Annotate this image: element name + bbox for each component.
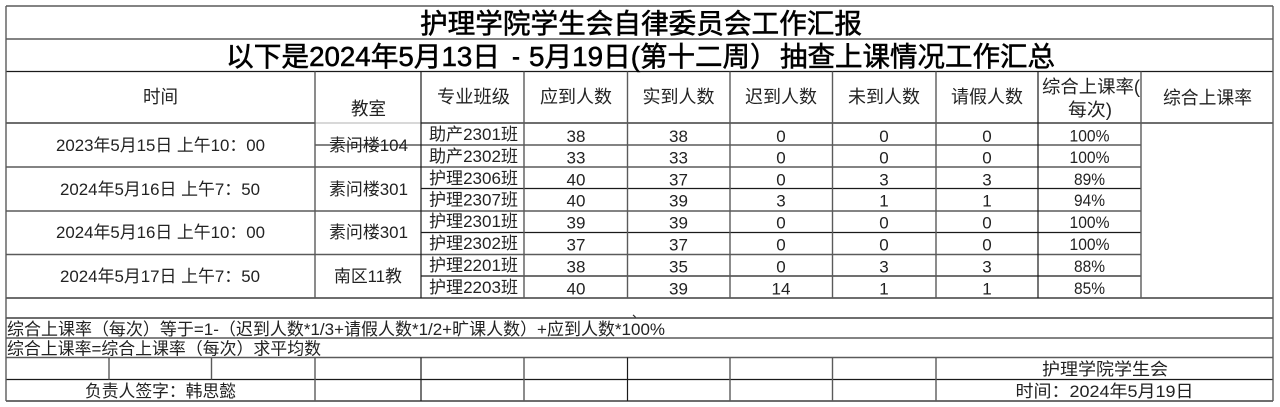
data row: 护理2307班: 40 — [567, 192, 585, 210]
data row: 护理2201班: 35 — [669, 258, 688, 276]
data row: 护理2307班: 3 — [776, 192, 786, 210]
data row: 护理2201班: 38 — [567, 258, 585, 276]
formula note: per-session rate: 综合上课率（每次）等于=1-（迟到人数*1/3+请假人数*1/2+旷课人数）+应到人数*100% — [7, 320, 665, 339]
data row: 护理2201班: 0 — [776, 258, 786, 276]
data row: 护理2302班: 0 — [879, 236, 889, 254]
report date: 时间：2024年5月19日 — [1016, 382, 1194, 401]
data row: 护理2203班 — [429, 278, 1105, 298]
classrooms: 素问楼301 — [329, 180, 408, 199]
session times: 2024年5月16日 上午7：50 — [60, 180, 260, 199]
data row: 护理2302班: 0 — [982, 236, 992, 254]
table header row: 专业班级 — [437, 87, 510, 107]
data row: 护理2203班: 护理2203班 — [429, 278, 518, 297]
table header row: 迟到人数 — [745, 87, 817, 107]
classrooms: 素问楼301 — [329, 223, 408, 242]
table header row: 实到人数 — [642, 87, 714, 107]
data row: 护理2201班: 护理2201班 — [429, 256, 518, 275]
data row: 助产2302班: 100% — [1070, 148, 1110, 167]
data row: 助产2301班: 0 — [879, 127, 889, 146]
data row: 护理2307班: 1 — [879, 192, 889, 210]
classrooms: 南区11教 — [334, 267, 402, 286]
data row: 护理2302班: 37 — [669, 236, 688, 254]
signature: 负责人签字：韩思懿 — [85, 382, 236, 401]
data row: 护理2201班: 3 — [879, 258, 889, 276]
data row: 护理2203班: 85% — [1074, 279, 1105, 298]
data row: 护理2301班: 100% — [1070, 213, 1110, 232]
data row: 护理2203班: 39 — [669, 280, 688, 298]
data row: 护理2302班 — [429, 234, 1110, 254]
data row: 护理2307班: 94% — [1074, 191, 1105, 210]
data row: 助产2301班: 0 — [982, 127, 992, 146]
data row: 助产2302班 — [429, 147, 1110, 168]
data row: 护理2307班: 护理2307班 — [429, 190, 518, 210]
table header row: 未到人数 — [848, 87, 920, 107]
session times: 2023年5月15日 上午10：00 — [56, 136, 265, 155]
subtitle: 抽查上课情况工作汇总 — [780, 41, 1055, 72]
formula note: average rate: 综合上课率=综合上课率（每次）求平均数 — [7, 340, 321, 358]
table header row: 综合上课率( — [1042, 77, 1140, 97]
data row: 护理2301班: 0 — [982, 214, 992, 232]
data row: 护理2301班: 39 — [669, 214, 688, 232]
subtitle: - — [512, 41, 520, 72]
classrooms — [329, 136, 408, 286]
data row: 护理2307班: 1 — [982, 192, 992, 210]
table header row: 教室 — [351, 99, 386, 119]
data row: 护理2302班: 100% — [1070, 235, 1110, 254]
data row: 护理2306班: 3 — [982, 170, 992, 190]
data row: 助产2301班: 助产2301班 — [429, 125, 518, 144]
data row: 护理2301班 — [429, 212, 1110, 232]
data row: 助产2301班: 38 — [567, 127, 585, 146]
data row: 助产2301班: 38 — [669, 127, 688, 146]
data row: 护理2301班: 39 — [567, 214, 585, 232]
data row: 护理2201班: 3 — [982, 258, 992, 276]
data row: 助产2301班 — [429, 125, 1110, 146]
data row: 护理2301班: 护理2301班 — [429, 212, 518, 231]
data row: 助产2302班: 0 — [982, 148, 992, 168]
session times — [56, 136, 265, 286]
data row: 护理2306班: 0 — [776, 170, 786, 190]
table header row: 应到人数 — [540, 87, 612, 107]
table header row: 时间 — [143, 87, 178, 107]
table header row: 综合上课率 — [1163, 88, 1252, 108]
data row: 护理2306班 — [429, 169, 1105, 190]
data row: 护理2307班 — [429, 190, 1105, 210]
data row: 护理2306班: 40 — [567, 170, 585, 190]
data row: 护理2306班: 3 — [879, 170, 889, 190]
data row: 助产2301班: 0 — [776, 127, 786, 146]
data row: 护理2203班: 14 — [772, 280, 790, 298]
data row: 护理2301班: 0 — [879, 214, 889, 232]
data row: 护理2306班: 37 — [669, 170, 688, 190]
session times: 2024年5月17日 上午7：50 — [60, 267, 260, 286]
data row: 助产2302班: 33 — [669, 148, 688, 168]
subtitle: 5月19日( — [529, 41, 640, 72]
subtitle: 第十二周） — [640, 41, 778, 72]
data row: 护理2301班: 0 — [776, 214, 786, 232]
subtitle — [226, 41, 1055, 72]
classrooms: 素问楼104 — [329, 136, 408, 155]
data row: 护理2306班: 护理2306班 — [429, 169, 518, 188]
session times: 2024年5月16日 上午10：00 — [56, 223, 265, 242]
data row: 护理2302班: 0 — [776, 236, 786, 254]
data row: 护理2306班: 89% — [1074, 170, 1105, 189]
data row: 助产2302班: 33 — [567, 148, 585, 168]
data row: 护理2201班 — [429, 256, 1105, 276]
data row: 助产2302班: 0 — [879, 148, 889, 168]
data row: 助产2301班: 100% — [1070, 126, 1110, 146]
data row: 护理2201班: 88% — [1074, 257, 1105, 276]
data row: 护理2302班: 护理2302班 — [429, 234, 518, 253]
data row: 护理2302班: 37 — [567, 236, 585, 254]
subtitle: 以下是2024年5月13日 — [226, 41, 500, 72]
data row: 护理2203班: 1 — [879, 280, 889, 298]
data row: 护理2203班: 1 — [982, 280, 992, 298]
title: 护理学院学生会自律委员会工作汇报 — [420, 8, 862, 39]
data row: 助产2302班: 0 — [776, 148, 786, 168]
table header row: 每次) — [1068, 100, 1112, 120]
data row: 护理2307班: 39 — [669, 192, 688, 210]
data row: 护理2203班: 40 — [567, 280, 585, 298]
table header row — [143, 77, 1252, 120]
stray mark: 、 — [632, 306, 644, 320]
data row: 助产2302班: 助产2302班 — [429, 147, 518, 166]
issuing organisation: 护理学院学生会 — [1042, 360, 1168, 379]
table header row: 请假人数 — [951, 87, 1023, 107]
